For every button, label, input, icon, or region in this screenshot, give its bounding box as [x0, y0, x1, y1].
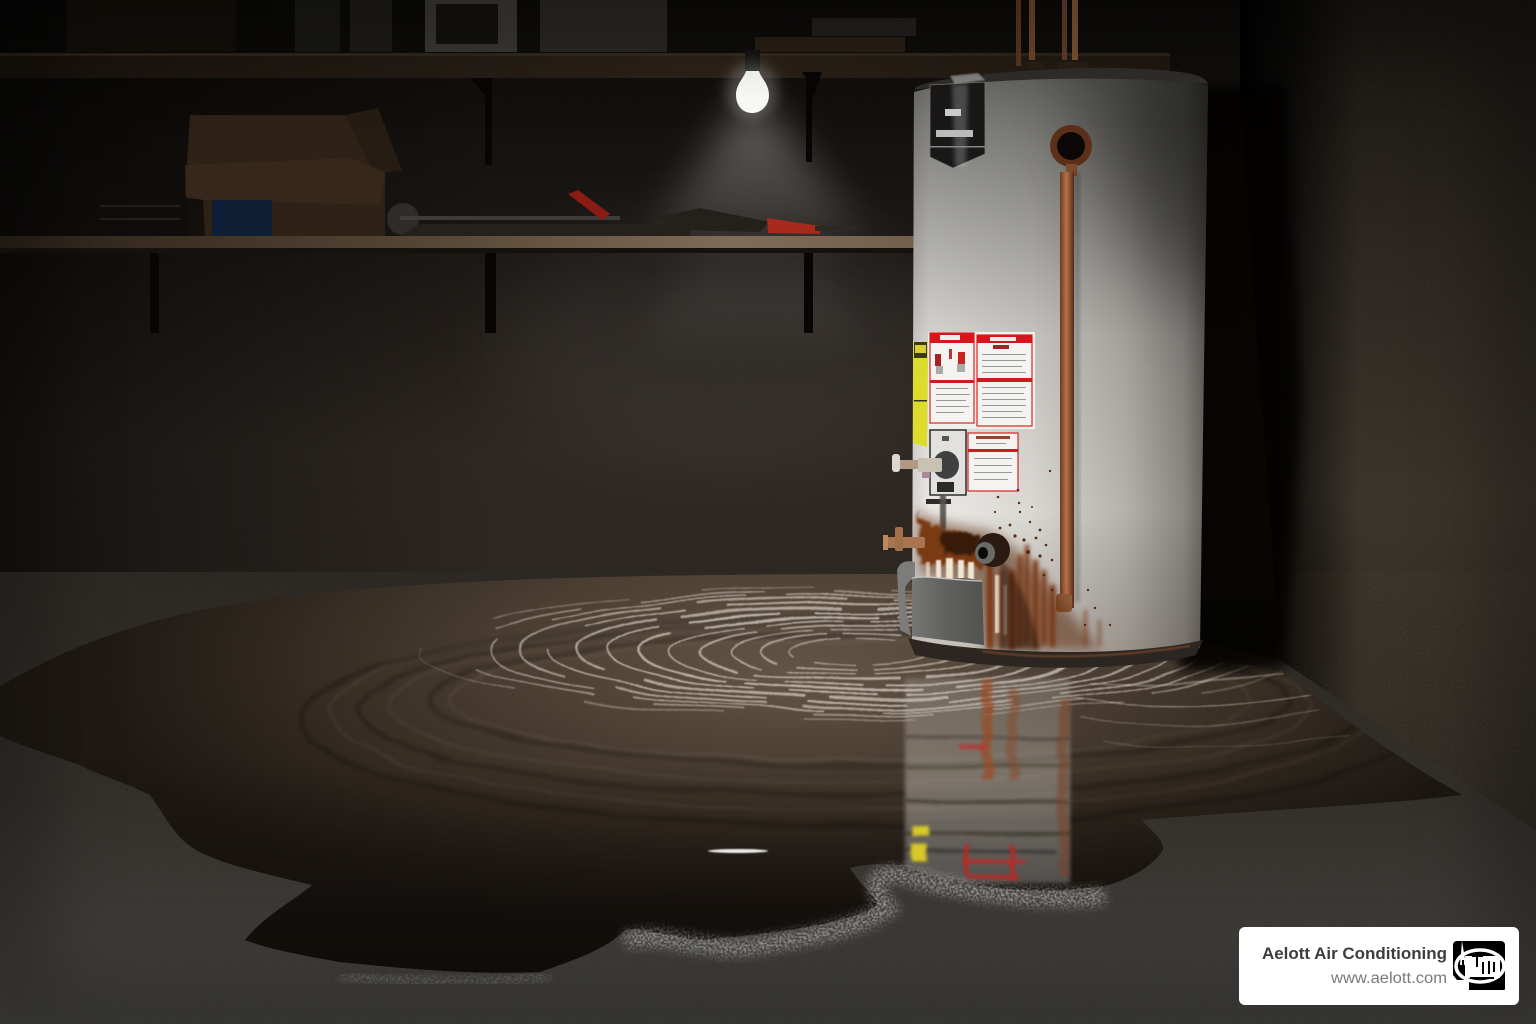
water heater tank	[912, 68, 1208, 652]
copper supply pipes on top	[1016, 0, 1088, 68]
top shelf	[0, 53, 1170, 78]
tank top rim	[915, 68, 1208, 90]
tools on shelf	[387, 190, 857, 236]
metal drip pan	[897, 561, 984, 645]
top shelf items	[66, 0, 916, 52]
back wall	[0, 0, 1536, 600]
black product label	[930, 82, 985, 168]
copper relief pipe and fitting	[1050, 125, 1092, 612]
lower shelf	[0, 236, 916, 253]
shadow behind tank	[1180, 85, 1300, 672]
floor	[0, 572, 1536, 1024]
right side wall	[1240, 0, 1536, 830]
logo icon	[1453, 941, 1505, 993]
website: www.aelott.com	[1330, 970, 1447, 987]
outlet fitting	[975, 533, 1010, 567]
cardboard box and clutter on lower shelf	[98, 108, 402, 237]
water puddle	[0, 570, 1536, 990]
shelf brackets	[150, 72, 822, 333]
faint light band right of tank	[1070, 672, 1350, 748]
light bulb	[726, 50, 778, 118]
tank base ring	[908, 638, 1203, 668]
brand card	[1239, 927, 1519, 1005]
upper valve	[892, 454, 942, 478]
yellow energy label	[913, 341, 928, 447]
light glow from bulb on wall	[500, 105, 960, 460]
water ripples	[300, 588, 1420, 825]
lower drain valve	[883, 527, 925, 551]
speckled wet edge of puddle	[340, 874, 1105, 982]
tank reflection in water	[708, 678, 1070, 883]
rust stains	[916, 470, 1111, 650]
brand name: Aelott Air Conditioning	[1262, 944, 1447, 963]
gas control panel	[926, 430, 966, 550]
warning stickers	[928, 332, 1035, 491]
